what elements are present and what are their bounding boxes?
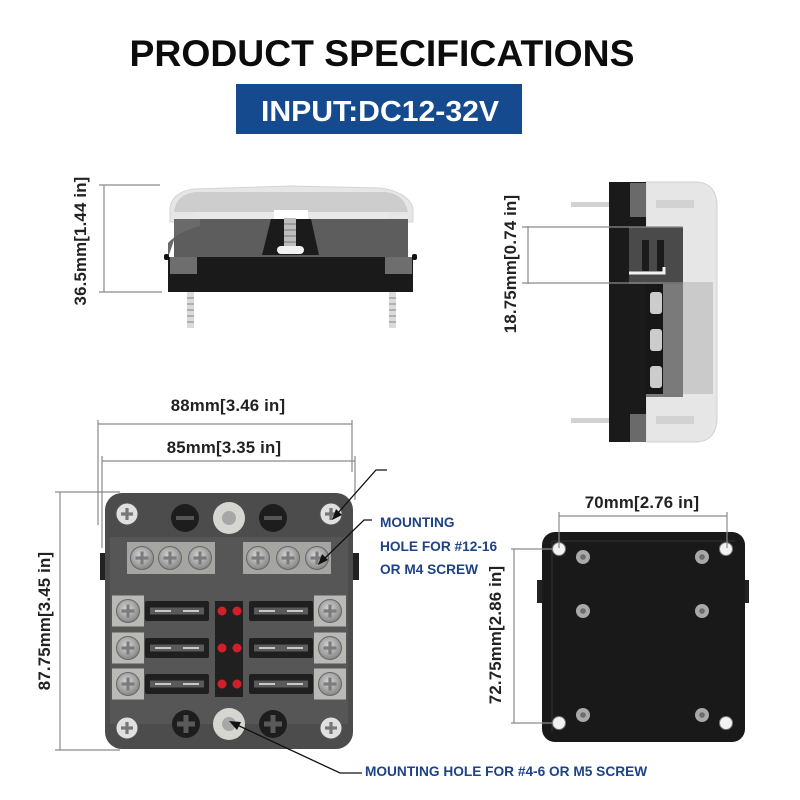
translucent cover xyxy=(170,186,413,222)
input voltage banner: INPUT:DC12-32V xyxy=(261,96,500,128)
LED indicator strip xyxy=(215,601,243,697)
base plate back xyxy=(542,532,745,742)
width dimension 88mm: 88mm[3.46 in] xyxy=(171,396,285,415)
mounting screws side xyxy=(571,200,694,424)
block housing xyxy=(105,493,353,749)
width dimension 85mm xyxy=(102,438,355,548)
width dimension 88mm xyxy=(98,396,352,525)
corner screws xyxy=(116,503,342,739)
fuse terminals xyxy=(112,596,346,700)
mounting screws xyxy=(187,292,396,328)
width dimension 85mm: 85mm[3.35 in] xyxy=(167,438,281,457)
height dimension 72.75mm xyxy=(486,549,553,723)
height dimension 87.75mm: 87.75mm[3.45 in] xyxy=(35,552,54,690)
height dimension 36.5mm: 36.5mm[1.44 in] xyxy=(71,177,90,305)
height dimension 36.5mm xyxy=(71,177,162,305)
title: PRODUCT SPECIFICATIONS xyxy=(130,33,634,74)
base plate side xyxy=(609,182,646,442)
height dimension 72.75mm: 72.75mm[2.86 in] xyxy=(486,566,505,704)
rivets back xyxy=(576,550,709,722)
callout: mounting hole for #12-16: MOUNTING xyxy=(380,515,455,530)
body block side xyxy=(629,227,683,397)
mounting holes back xyxy=(552,542,732,730)
round terminals xyxy=(171,502,287,740)
callout: mounting hole for #12-16: OR M4 SCREW xyxy=(380,562,478,577)
callout: mounting hole for #4-6: MOUNTING HOLE FOR #4-6 OR M5 SCREW xyxy=(365,764,647,779)
callout arrows xyxy=(229,470,387,773)
bottom-left panel: front view of fuse block xyxy=(35,396,359,750)
height dimension 18.75mm xyxy=(501,195,683,333)
width dimension 70mm xyxy=(559,493,727,548)
callout: mounting hole for #12-16: HOLE FOR #12-16 xyxy=(380,539,498,554)
top-left panel: end view with height dimension xyxy=(71,177,417,328)
height dimension 18.75mm: 18.75mm[0.74 in] xyxy=(501,195,520,333)
translucent cover side xyxy=(646,182,717,442)
top-right panel: side view with dimension xyxy=(501,182,717,442)
blade fuses xyxy=(145,601,313,694)
bottom-right panel: back view xyxy=(486,493,749,742)
side clips back xyxy=(537,580,543,603)
input voltage banner xyxy=(236,84,522,134)
side clips xyxy=(100,553,106,580)
width dimension 70mm: 70mm[2.76 in] xyxy=(585,493,699,512)
bus bars xyxy=(127,542,331,574)
height dimension 87.75mm xyxy=(35,492,120,750)
fuse block body xyxy=(164,218,417,292)
